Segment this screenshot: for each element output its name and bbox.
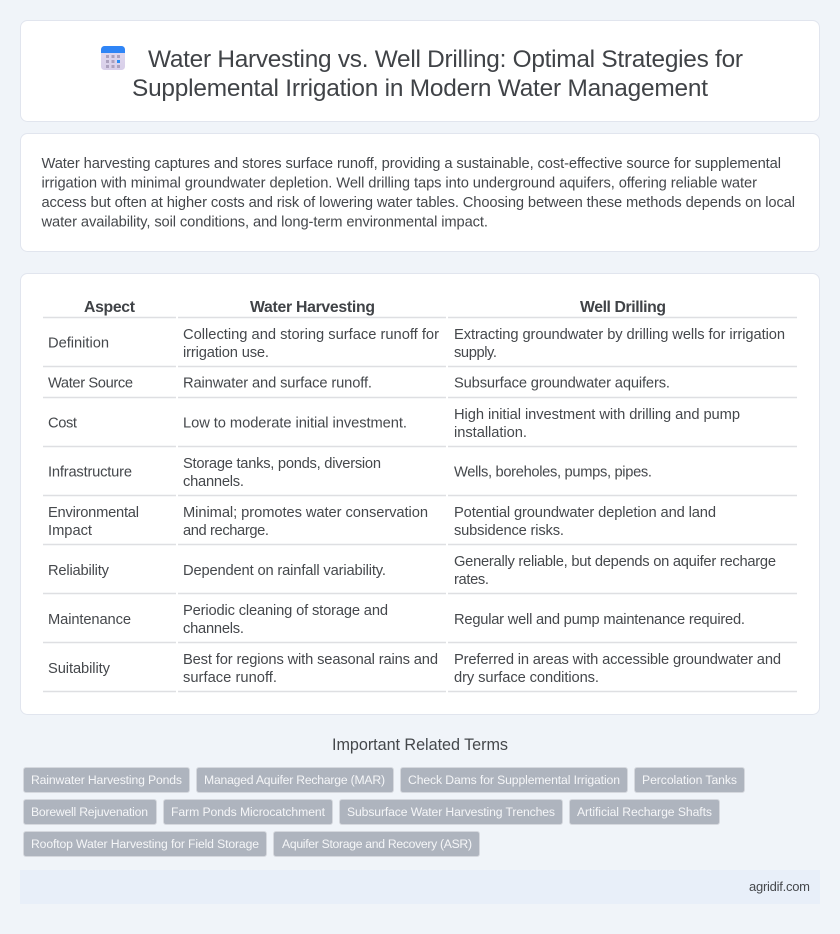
- table row: suitability: Suitability: [48, 661, 111, 677]
- tag: rainwater harvesting ponds: [24, 768, 190, 792]
- text block: introduction paragraph: access but often at higher costs and risk of lowering water tables. Choosing between these methods depends on local: [42, 195, 795, 211]
- table row: suitability: surface runoff.: [183, 670, 277, 686]
- tag: aquifer storage and recovery: [274, 832, 480, 856]
- text block: introduction paragraph: [40, 156, 795, 230]
- table row: infrastructure: Wells, boreholes, pumps, pipes.: [454, 464, 652, 480]
- table row: definition: supply.: [454, 345, 497, 361]
- table row: reliability: Dependent on rainfall variability.: [183, 563, 386, 579]
- tag: rooftop water harvesting: Rooftop Water Harvesting for Field Storage: [31, 837, 259, 851]
- tag: artificial recharge shafts: [570, 800, 720, 824]
- table row: water source: [48, 376, 670, 392]
- tag: aquifer storage and recovery: Aquifer Storage and Recovery (ASR): [282, 837, 472, 851]
- table row: environmental impact: and recharge.: [183, 523, 269, 539]
- footer: agridif.com: [749, 879, 810, 894]
- table row: environmental impact: Potential groundwater depletion and land: [454, 505, 716, 521]
- table row: environmental impact: Impact: [48, 523, 92, 539]
- table row: reliability: rates.: [454, 572, 489, 588]
- table row: cost: High initial investment with drilling and pump: [454, 407, 740, 423]
- table row: definition: Definition: [48, 336, 109, 352]
- icon: calendar grid: [101, 46, 125, 70]
- heading: related terms: Important Related Terms: [332, 736, 508, 754]
- table row: definition: irrigation use.: [183, 345, 269, 361]
- table row: suitability: dry surface conditions.: [454, 670, 599, 686]
- table row: reliability: Generally reliable, but depends on aquifer recharge: [454, 554, 776, 570]
- tag: percolation tanks: [634, 768, 744, 792]
- table row: infrastructure: [48, 456, 652, 490]
- table row: infrastructure: channels.: [183, 474, 244, 490]
- table row: suitability: Best for regions with seasonal rains and: [183, 652, 438, 668]
- table header: Well Drilling: [580, 299, 666, 316]
- table row: environmental impact: Minimal; promotes water conservation: [183, 505, 428, 521]
- table row: cost: Low to moderate initial investment.: [183, 416, 407, 432]
- heading: title: [132, 46, 743, 102]
- footer: [20, 870, 820, 904]
- table row: water source: Rainwater and surface runoff.: [183, 376, 372, 392]
- table row: cost: [48, 407, 740, 441]
- table row: reliability: Reliability: [48, 563, 110, 579]
- tag: farm ponds microcatchment: Farm Ponds Microcatchment: [171, 805, 326, 819]
- tag: artificial recharge shafts: Artificial Recharge Shafts: [577, 805, 712, 819]
- table row: definition: Extracting groundwater by drilling wells for irrigation: [454, 327, 785, 343]
- tag: borewell rejuvenation: Borewell Rejuvenation: [31, 805, 148, 819]
- table row: environmental impact: [48, 505, 716, 539]
- panel: comparison table: [20, 274, 820, 714]
- table row: maintenance: Maintenance: [48, 612, 131, 628]
- tag: subsurface water harvesting trenches: Subsurface Water Harvesting Trenches: [347, 805, 555, 819]
- table header: Water Harvesting: [250, 299, 375, 316]
- tag: check dams: [400, 768, 628, 792]
- tag: borewell rejuvenation: [24, 800, 156, 824]
- heading: title: Water Harvesting vs. Well Drilling: Optimal Strategies for: [148, 46, 743, 73]
- text block: introduction paragraph: Water harvesting captures and stores surface runoff, providing a sustainable, cost-effective source for supplemental: [42, 156, 781, 172]
- table row: cost: installation.: [454, 425, 527, 441]
- table row: suitability: Preferred in areas with accessible groundwater and: [454, 652, 781, 668]
- table row: water source: Water Source: [48, 376, 133, 392]
- table row: maintenance: channels.: [183, 621, 244, 637]
- tag: rainwater harvesting ponds: Rainwater Harvesting Ponds: [31, 773, 182, 787]
- tag: managed aquifer recharge: Managed Aquifer Recharge (MAR): [204, 773, 385, 787]
- tag: subsurface water harvesting trenches: [340, 800, 562, 824]
- table row: cost: Cost: [48, 416, 77, 432]
- tag: percolation tanks: Percolation Tanks: [642, 773, 737, 787]
- text block: introduction paragraph: irrigation with minimal groundwater depletion. Well drilling taps into underground aquifers, offering reliable water: [42, 176, 757, 192]
- section: important related terms: [24, 736, 744, 856]
- table row: environmental impact: subsidence risks.: [454, 523, 564, 539]
- panel: title header: [20, 20, 820, 122]
- tag: managed aquifer recharge: [196, 768, 394, 792]
- tag: farm ponds microcatchment: [164, 800, 332, 824]
- table row: maintenance: Periodic cleaning of storage and: [183, 603, 388, 619]
- table row: definition: Collecting and storing surface runoff for: [183, 327, 439, 343]
- tag: check dams: Check Dams for Supplemental Irrigation: [408, 773, 620, 787]
- table row: reliability: [48, 554, 776, 588]
- table row: maintenance: [48, 603, 745, 637]
- table header: Aspect: [84, 299, 136, 316]
- panel: introduction: [20, 134, 820, 252]
- tag: rooftop water harvesting: [24, 832, 266, 856]
- table row: suitability: [48, 652, 781, 686]
- table row: water source: Subsurface groundwater aquifers.: [454, 376, 670, 392]
- text block: introduction paragraph: water availability, soil conditions, and long-term environmental impact.: [40, 214, 488, 230]
- heading: title: Supplemental Irrigation in Modern Water Management: [132, 75, 708, 102]
- table row: infrastructure: Storage tanks, ponds, diversion: [183, 456, 381, 472]
- table header: [84, 299, 666, 316]
- table row: infrastructure: Infrastructure: [48, 464, 132, 480]
- table row: definition: [48, 327, 785, 361]
- table row: maintenance: Regular well and pump maintenance required.: [454, 612, 745, 628]
- table row: environmental impact: Environmental: [48, 505, 139, 521]
